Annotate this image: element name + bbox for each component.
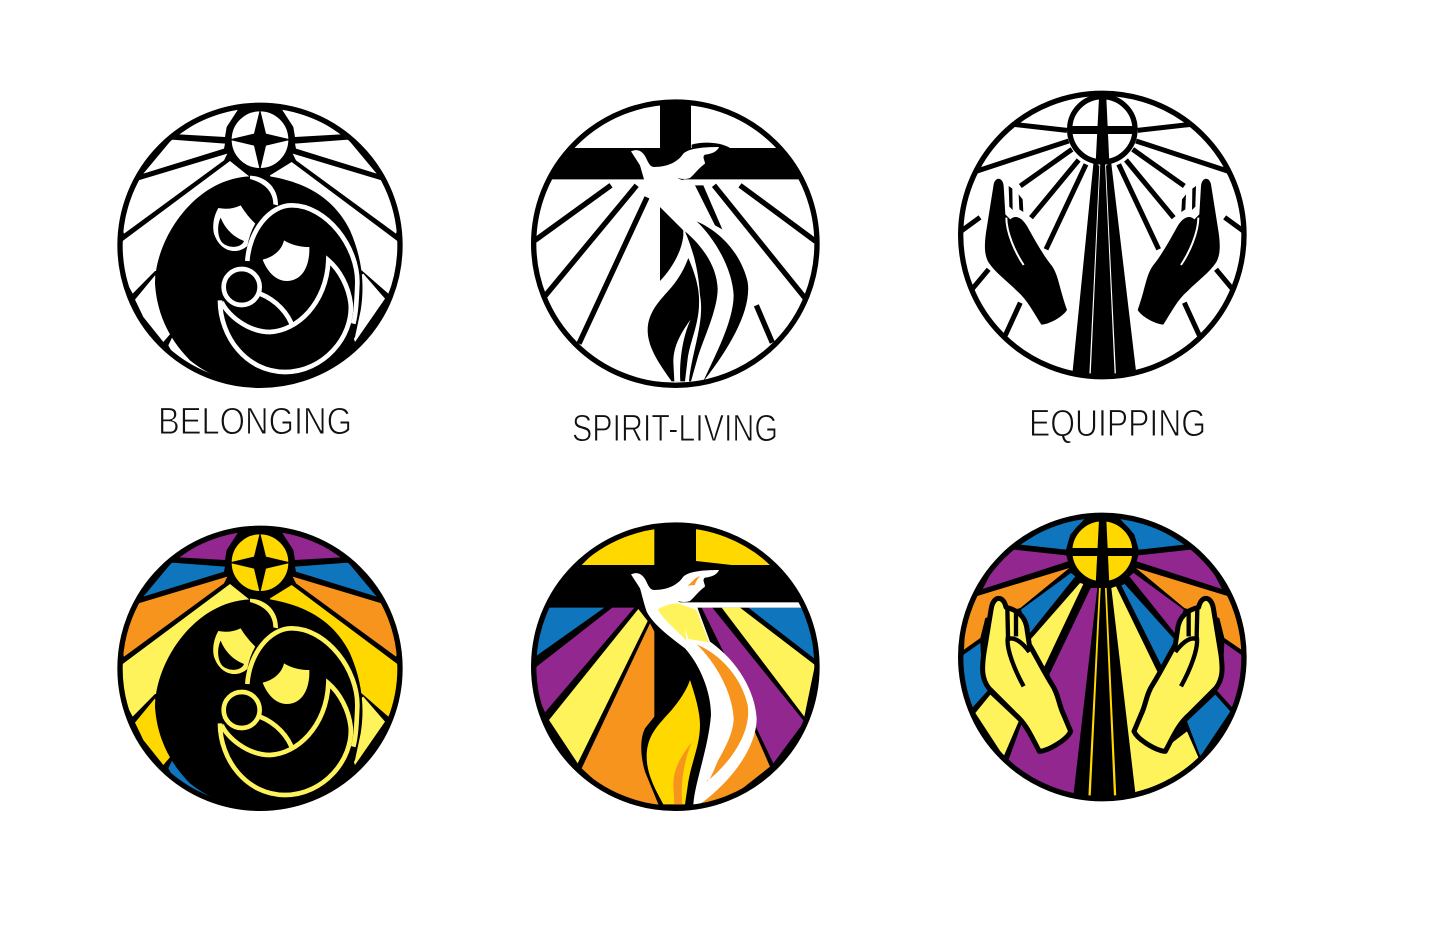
icon: right hand xyxy=(1134,598,1222,751)
icon: belonging coloured xyxy=(117,527,403,810)
icon: belonging black and white xyxy=(117,104,403,387)
label: equipping: EQUIPPING xyxy=(1029,403,1206,445)
icon: spirit-living coloured xyxy=(532,523,818,809)
label: spirit-living: SPIRIT-LIVING xyxy=(572,408,778,450)
icon: equipping coloured xyxy=(959,514,1246,801)
icon: left hand xyxy=(983,598,1071,751)
label: belonging: BELONGING xyxy=(158,401,352,443)
icon: right hand xyxy=(1138,179,1220,325)
icon: left hand xyxy=(985,179,1067,325)
icon: spirit-living black and white xyxy=(525,99,825,385)
icon: equipping black and white xyxy=(961,93,1244,377)
